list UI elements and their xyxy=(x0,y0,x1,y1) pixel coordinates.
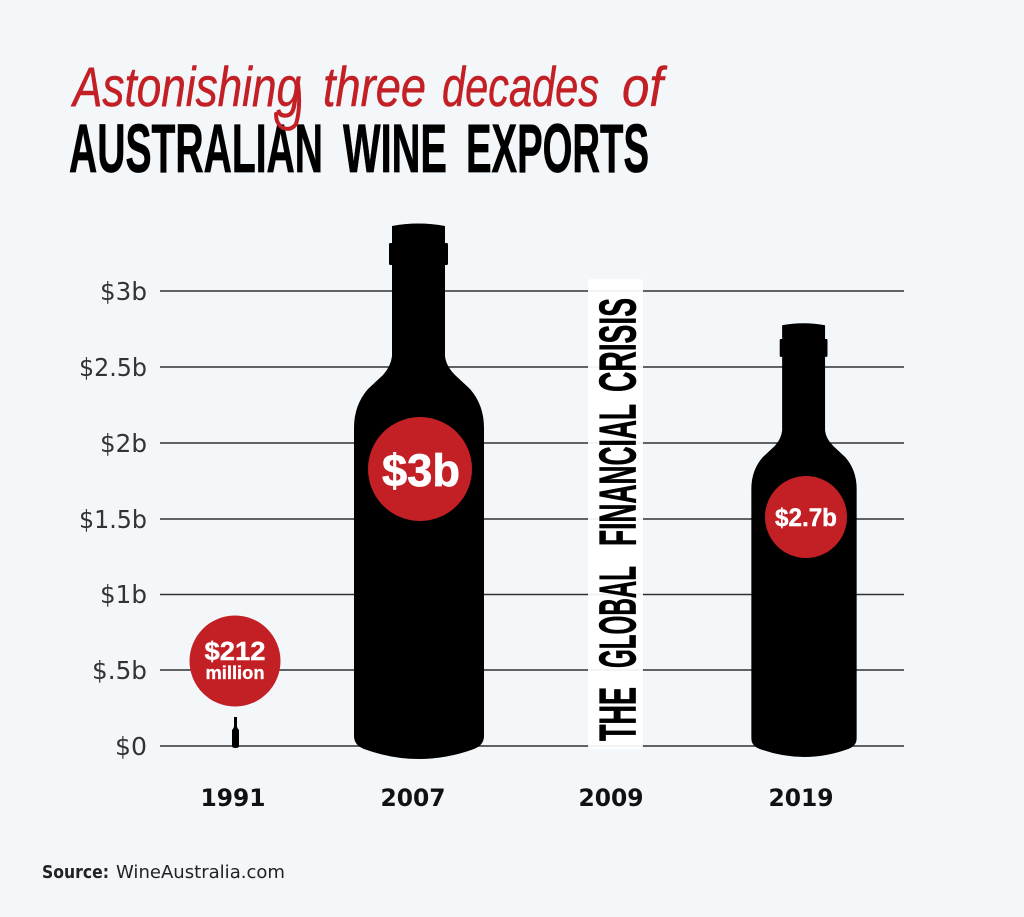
x axis labels: 2019 xyxy=(768,784,834,812)
y axis labels: $2b xyxy=(100,429,147,458)
bottle: 1991 xyxy=(232,717,239,748)
title: red script line: three xyxy=(323,55,426,118)
title: main heading: WINE xyxy=(343,110,447,187)
title: red script line: of xyxy=(622,55,668,118)
y axis labels: $1.5b xyxy=(79,505,147,534)
annotation: global financial crisis: GLOBAL xyxy=(590,566,648,668)
bottle: 2019 xyxy=(751,323,857,757)
x axis labels: 2007 xyxy=(380,784,446,812)
annotation: global financial crisis xyxy=(588,279,648,749)
x axis labels xyxy=(200,784,834,812)
callout: 3b: $3b xyxy=(382,445,460,496)
callout: 2.7b: $2.7b xyxy=(775,504,837,532)
y axis labels: $3b xyxy=(100,277,147,306)
x axis labels: 1991 xyxy=(200,784,266,812)
callout: 212 million xyxy=(190,616,280,706)
title: red script line xyxy=(71,55,668,129)
title: red script line: decades xyxy=(442,55,599,118)
annotation: global financial crisis: CRISIS xyxy=(590,298,648,392)
source xyxy=(42,862,285,883)
title: main heading: EXPORTS xyxy=(466,110,649,187)
annotation: global financial crisis: FINANCIAL xyxy=(590,404,648,546)
y axis labels: $0 xyxy=(115,732,147,761)
callout: 212 million: $212 xyxy=(204,636,266,666)
y axis labels: $2.5b xyxy=(79,353,147,382)
y axis labels xyxy=(79,277,147,761)
annotation: global financial crisis: THE xyxy=(590,687,648,741)
x axis labels: 2009 xyxy=(578,784,644,812)
title: red script line: Astonishing xyxy=(71,55,301,118)
y axis labels: $1b xyxy=(100,580,147,609)
callout: 2.7b xyxy=(765,476,847,558)
y axis labels: $.5b xyxy=(92,656,147,685)
source: Source: xyxy=(42,862,109,883)
bottle: 2007 xyxy=(354,224,484,759)
title: main heading: AUSTRALIAN xyxy=(69,110,323,187)
source: WineAustralia.com xyxy=(116,862,285,883)
callout: 3b xyxy=(368,417,472,521)
callout: 212 million: million xyxy=(206,663,264,683)
